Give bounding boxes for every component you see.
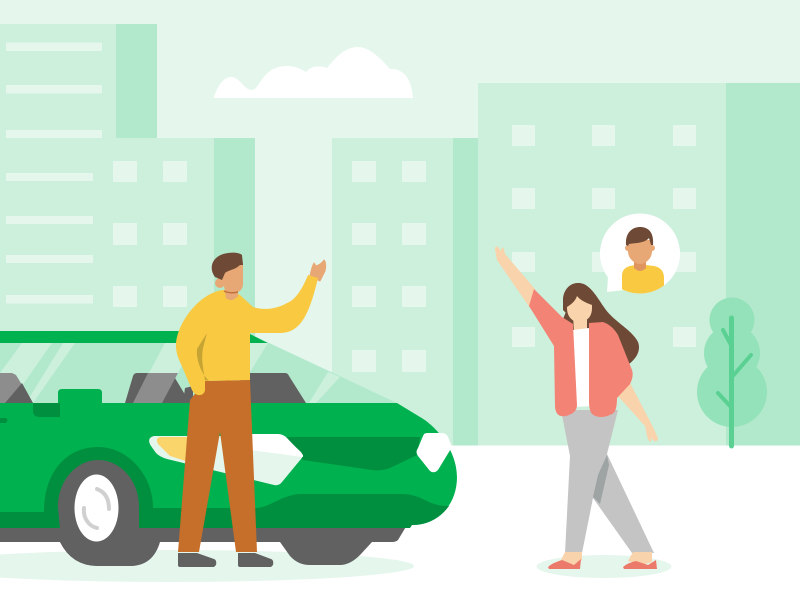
man sweater [176,275,318,395]
tree [697,298,767,446]
ground shadow: woman [536,555,672,578]
rear door bump [58,389,102,403]
cloud [214,47,413,98]
wheel arch [44,447,153,528]
sky background [0,0,800,446]
man head [212,253,243,300]
bubble avatar [622,227,664,300]
woman left arm [495,246,535,308]
car glass [0,334,397,403]
trouser shadow [593,455,609,504]
man trousers [178,380,257,552]
woman face [567,293,592,322]
car body [0,403,457,527]
seats [0,373,306,403]
man [176,253,326,567]
woman [495,246,658,569]
woman hair back [562,283,639,364]
rear wheel [58,460,160,566]
body accent [285,437,420,470]
building: right [478,83,800,446]
building: middle [332,138,478,446]
man hand [310,260,326,281]
woman shoes [548,559,657,569]
car [0,331,457,566]
side light [149,434,303,485]
car roof bar [0,331,268,343]
woman feet [560,552,652,565]
body lower band [0,494,449,528]
man shoes [178,553,273,567]
woman front hair [563,283,594,313]
headlight [416,433,452,472]
door recess [33,403,60,417]
rear tire and underbody [0,520,410,566]
woman neck [573,316,587,336]
woman right arm [617,381,658,442]
door handle [0,418,8,423]
speech bubble [600,214,680,300]
ground shadow: car [0,550,414,582]
woman trousers [561,410,654,553]
woman shirt [573,328,592,407]
glass highlights [0,343,340,403]
building: left tower [0,24,255,338]
woman jacket [529,289,633,417]
man arm shadow [197,333,209,381]
